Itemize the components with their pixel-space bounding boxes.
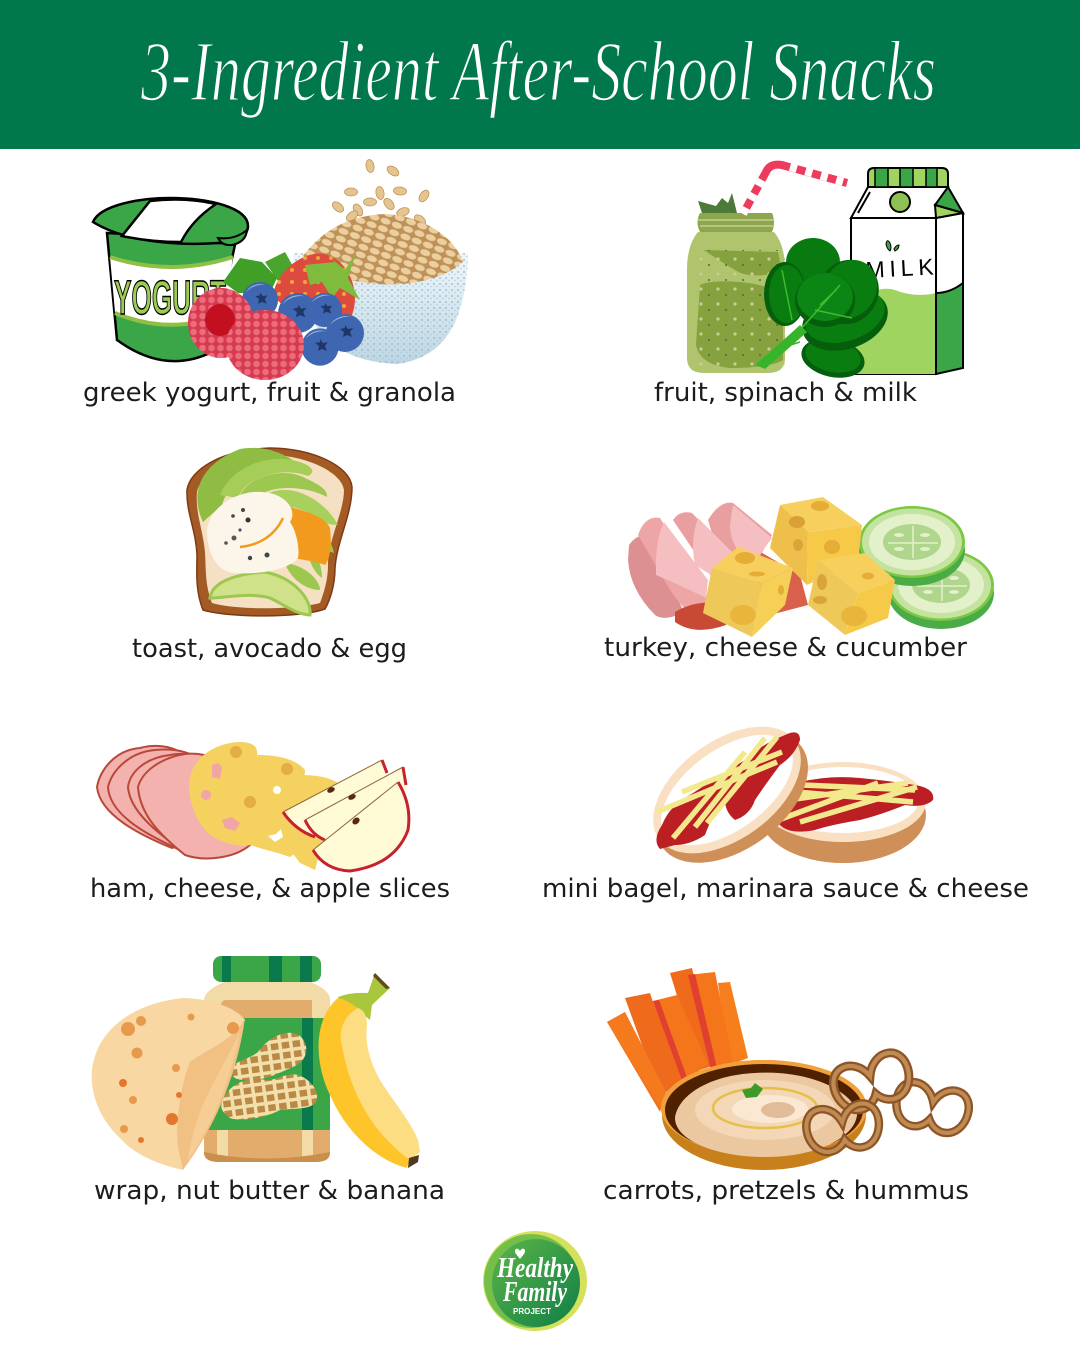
icon: bagel half right <box>760 762 933 863</box>
caption: wrap, nut butter & banana: wrap, nut butter & banana <box>94 1176 445 1206</box>
icon: spinach leaves <box>757 238 896 383</box>
icon: egg yolk <box>280 505 331 565</box>
caption: carrots, pretzels & hummus: carrots, pretzels & hummus <box>603 1176 969 1206</box>
panel: ham, cheese and apple slices <box>97 742 409 871</box>
icon: milk carton: MILK <box>865 253 935 283</box>
logo: Healthy Family Project: PROJECT <box>513 1307 551 1316</box>
icon: green smoothie jar <box>687 165 847 373</box>
icon: nut butter jar <box>204 956 330 1162</box>
icon: pretzels <box>804 1048 972 1155</box>
panel: carrots, pretzels and hummus <box>607 968 972 1170</box>
caption: ham, cheese, & apple slices: ham, cheese, & apple slices <box>90 874 450 904</box>
header band <box>0 0 1080 149</box>
icon: avocado slices <box>197 448 338 615</box>
caption: turkey, cheese & cucumber: turkey, cheese & cucumber <box>604 633 967 663</box>
panel: wrap, nut butter and banana <box>92 956 420 1170</box>
panel: greek yogurt, fruit and granola <box>93 159 468 380</box>
caption: greek yogurt, fruit & granola: greek yogurt, fruit & granola <box>83 378 456 408</box>
icon: banana <box>319 973 420 1168</box>
icon: yogurt cup <box>93 198 248 361</box>
panel: turkey, cheese and cucumber <box>628 497 994 637</box>
icon: tortilla wrap <box>92 998 245 1170</box>
icon: milk carton <box>851 168 963 374</box>
icon: cheese cubes <box>703 497 895 637</box>
icon: toast crust <box>187 448 352 616</box>
panel: mini bagel, marinara sauce and cheese <box>630 701 933 890</box>
logo: Healthy Family Project: Healthy <box>496 1252 573 1284</box>
icon: poached egg <box>207 492 299 573</box>
panel: fruit, spinach and milk <box>687 165 963 383</box>
icon: apple slices <box>283 760 409 871</box>
icon: carrot sticks <box>607 968 748 1112</box>
caption: mini bagel, marinara sauce & cheese: mini bagel, marinara sauce & cheese <box>542 874 1029 904</box>
icon: hummus bowl <box>661 1060 867 1170</box>
icon: toast surface <box>197 455 344 608</box>
caption: toast, avocado & egg: toast, avocado & egg <box>132 634 407 664</box>
icon: cheese slices <box>189 742 338 870</box>
caption: fruit, spinach & milk: fruit, spinach & milk <box>654 378 917 408</box>
logo: Healthy Family Project: Family <box>502 1276 567 1308</box>
icon: ham slices <box>97 746 250 858</box>
icon: raspberries <box>188 288 304 380</box>
icon: bagel half left <box>630 701 832 890</box>
icon: cucumber slices <box>859 506 994 629</box>
icon: strawberry and leaves <box>223 250 360 320</box>
icon: blueberries <box>242 282 364 366</box>
icon: granola bowl <box>293 159 468 364</box>
icon: turkey slices <box>628 503 808 630</box>
logo: Healthy Family Project <box>483 1231 587 1331</box>
panel: toast, avocado and egg <box>187 448 352 616</box>
icon: yogurt cup: YOGURT <box>114 272 226 325</box>
